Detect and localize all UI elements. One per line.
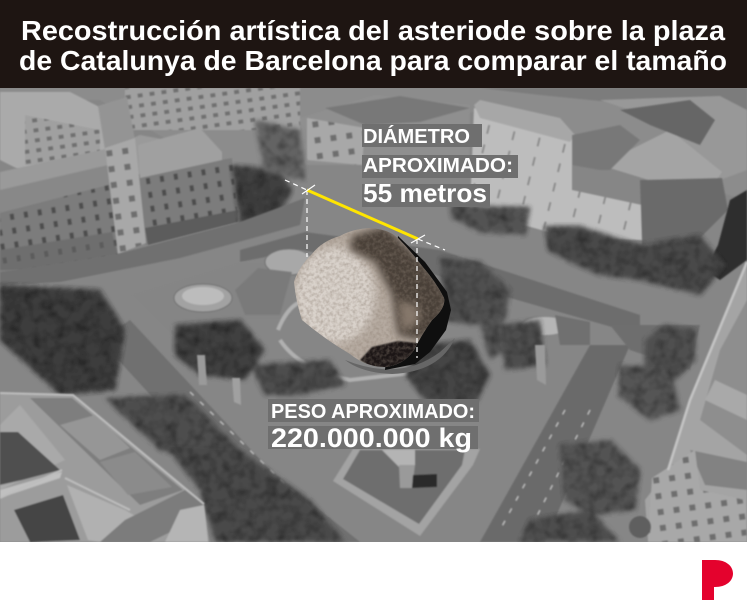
yellow diameter line [307,190,418,239]
label: weight: 220.000.000 kg [271,423,472,453]
large white building with round corner, top right [470,100,728,245]
roads around the square [100,232,700,542]
monuments on the promenade [197,345,546,405]
dark tree shadow, right edge [714,190,747,281]
label: diameter: 55 metros [363,178,487,208]
logo: red P [702,560,733,600]
bottom-right building [629,262,747,542]
label: diameter [362,124,518,208]
title banner: de Catalunya de Barcelona para comparar el tamaño [19,45,727,76]
asteroid shadow on the ground [345,236,455,374]
label: diameter: DIÁMETRO [363,125,470,148]
road below the tall building [0,198,305,285]
bottom-left office building [0,393,209,542]
label: diameter: APROXIMADO: [363,155,513,177]
tall corner building, top left [0,97,305,272]
title banner [0,0,747,88]
label: weight: PESO APROXIMADO: [271,401,475,423]
plaza circles and pavements [130,249,590,380]
trees around the square [0,205,725,542]
diameter measure [285,180,445,358]
dashed guide lines [285,180,445,358]
title banner: Recostrucción artística del asteriode sobre la plaza [21,15,726,46]
diamond monument garden [333,449,480,536]
background city blocks [0,88,747,180]
end ticks [302,185,425,243]
asteroid [290,225,450,370]
label: weight [268,399,479,453]
aerial photo of Plaça de Catalunya [0,88,747,542]
